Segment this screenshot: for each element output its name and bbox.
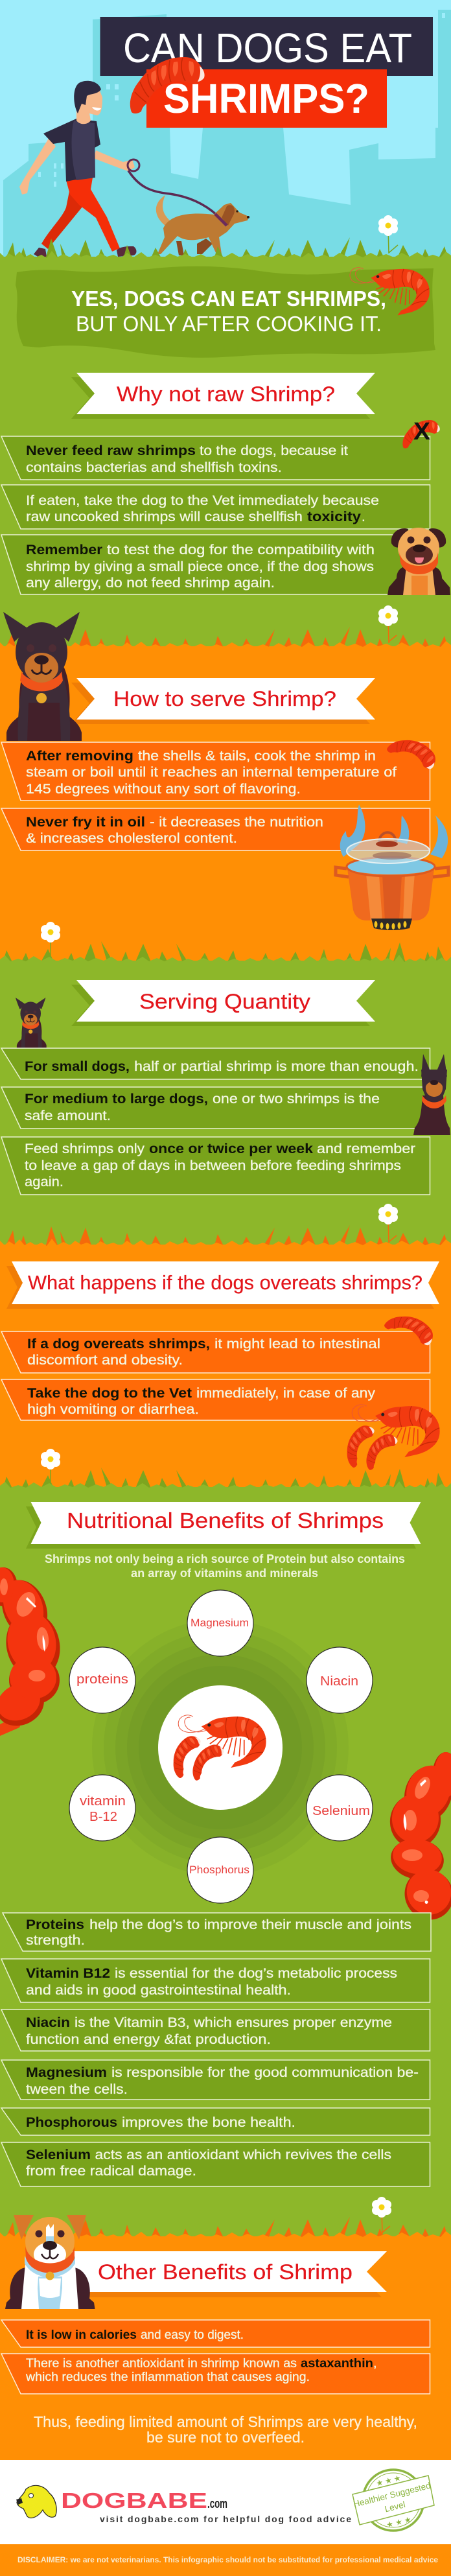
panel: never fry: - it decreases the nutrition	[150, 815, 323, 830]
panel: after removing: steam or boil until it reaches an internal temperature of	[26, 765, 397, 780]
answer panel: BUT ONLY AFTER COOKING IT.	[76, 312, 382, 336]
node: proteins: proteins	[76, 1672, 128, 1687]
panel: small dogs: half or partial shrimp is more than enough.	[134, 1059, 419, 1074]
intro text: an array of vitamins and minerals	[131, 1567, 318, 1580]
man walking	[19, 81, 136, 257]
node: selenium	[306, 1775, 373, 1841]
logo: dogbabe	[16, 2485, 351, 2524]
panel: remember to test: to test the dog for the compatibility with	[107, 543, 375, 557]
icon: crossed shrimp: X	[413, 418, 431, 445]
heading: what happens if overeats: What happens if the dogs overeats shrimps?	[28, 1271, 422, 1294]
disclaimer: DISCLAIMER: we are not veterinarians. This infographic should not be substituted for professional medical advice	[17, 2557, 438, 2564]
icon: peeled shrimp on title	[130, 57, 205, 113]
node: niacin: Niacin	[320, 1674, 358, 1689]
panel: proteins: strength.	[26, 1933, 85, 1948]
stamp: healthier suggested level: ★ ★ ★	[375, 2473, 402, 2488]
closing statement: Thus, feeding limited amount of Shrimps are very healthy,	[34, 2413, 417, 2430]
central shrimp disc	[158, 1685, 283, 1810]
panel: overeats: it might lead to intestinal	[214, 1337, 380, 1352]
icon: big shrimp right	[385, 1752, 451, 1928]
panel: take to vet: .	[362, 509, 365, 524]
panel: take the dog to the vet: immediately, in case of any	[196, 1386, 376, 1401]
grass: sky to green	[0, 237, 451, 262]
icon: white and orange dog	[5, 2215, 95, 2309]
panel: take to vet	[1, 485, 430, 529]
icon: red shrimp	[350, 268, 430, 315]
panel: after removing: After removing	[26, 749, 133, 764]
panel: magnesium	[1, 2060, 430, 2100]
icon: shrimp	[383, 1303, 438, 1359]
logo: dogbabe: .com	[207, 2497, 227, 2511]
panel: selenium: acts as an antioxidant which revives the cells	[95, 2148, 391, 2162]
stamp: healthier suggested level: ★ ★ ★	[386, 2514, 412, 2529]
panel: remember to test	[1, 535, 430, 594]
panel: proteins: help the dog’s to improve their muscle and joints	[89, 1917, 411, 1932]
logo: dogbabe: visit dogbabe.com for helpful dog food advice	[100, 2514, 351, 2524]
panel: never feed raw: Never feed raw shrimps	[26, 443, 196, 458]
panel: niacin	[1, 2009, 430, 2051]
heading: why not raw shrimp	[71, 373, 375, 419]
answer panel	[16, 266, 435, 358]
intro text	[45, 1552, 405, 1580]
panel: remember to test: Remember	[26, 543, 102, 557]
icon: black dog	[3, 612, 82, 741]
node: vitamin b-12: vitamin	[80, 1794, 126, 1809]
heading: how to serve shrimp: How to serve Shrimp?	[113, 687, 336, 710]
icon: shrimp	[386, 727, 441, 783]
panel: magnesium: tween the cells.	[26, 2082, 128, 2097]
node: phosphorus	[187, 1837, 253, 1903]
intro text: Shrimps not only being a rich source of Protein but also contains	[45, 1552, 405, 1565]
panel: after removing	[1, 742, 430, 801]
icon: flower	[372, 2197, 391, 2234]
panel: never fry	[1, 808, 430, 850]
panel: vitamin b12: Vitamin B12	[26, 1966, 110, 1981]
panel: astaxanthin: astaxanthin	[301, 2356, 373, 2371]
panel: low in calories: and easy to digest.	[141, 2328, 244, 2342]
panel: niacin: Niacin	[26, 2015, 70, 2030]
halo rings	[92, 1619, 349, 1876]
panel: after removing: 145 degrees without any sort of flavoring.	[26, 782, 301, 797]
dog on leash	[128, 159, 249, 255]
panel: once or twice per week: Feed shrimps only	[25, 1142, 145, 1156]
panel: selenium: from free radical damage.	[26, 2164, 196, 2179]
node: niacin	[306, 1647, 373, 1713]
panel: take to vet: toxicity	[307, 509, 361, 524]
panel: remember to test: shrimp by giving a small piece once, if the dog shows	[26, 559, 374, 574]
icon: flower	[41, 1449, 60, 1487]
title: shrimps: SHRIMPS?	[163, 75, 369, 122]
heading: serving quantity: Serving Quantity	[139, 990, 310, 1013]
icon: pug dog	[387, 528, 450, 595]
panel: phosphorous: improves the bone health.	[122, 2115, 295, 2130]
panel: niacin: function and energy &fat production.	[26, 2032, 271, 2047]
grass: orange to green	[0, 941, 451, 966]
heading: other benefits	[65, 2251, 387, 2297]
panel: take to vet: raw uncooked shrimps will cause shellfish	[26, 509, 303, 524]
closing statement: be sure not to overfeed.	[146, 2429, 305, 2446]
node: phosphorus: Phosphorus	[189, 1864, 249, 1876]
answer panel: YES, DOGS CAN EAT SHRIMPS,	[71, 287, 386, 310]
node: selenium: Selenium	[312, 1804, 370, 1818]
stamp: healthier suggested level: Healthier Suggested	[353, 2481, 432, 2509]
panel: after removing: the shells & tails, cook the shrimp in	[138, 749, 376, 764]
panel: once or twice per week: once or twice per week	[149, 1142, 313, 1156]
panel: overeats: If a dog overeats shrimps,	[27, 1337, 210, 1352]
icon: big shrimp left	[0, 1567, 66, 1736]
grass: green to orange	[0, 627, 451, 651]
grass: green to orange	[0, 2217, 451, 2242]
panel: medium to large dogs: For medium to large dogs,	[25, 1092, 208, 1107]
panel: phosphorous: Phosphorous	[26, 2115, 117, 2130]
panel: medium to large dogs: safe amount.	[25, 1108, 111, 1123]
panel: never feed raw: to the dogs, because it	[200, 443, 348, 458]
heading: what happens if overeats	[6, 1261, 439, 1309]
grass: orange to green	[0, 1468, 451, 1492]
panel: never fry: & increases cholesterol content.	[26, 831, 237, 846]
panel: once or twice per week	[1, 1137, 430, 1195]
panel: medium to large dogs	[1, 1087, 430, 1129]
panel: never feed raw: contains bacterias and shellfish toxins.	[26, 460, 282, 475]
node: vitamin b-12: B-12	[89, 1810, 117, 1824]
panel: niacin: is the Vitamin B3, which ensures proper enzyme	[75, 2015, 392, 2030]
title: can dogs eat: CAN DOGS EAT	[123, 25, 412, 71]
panel: magnesium: Magnesium	[26, 2065, 107, 2080]
panel: overeats: discomfort and obesity.	[27, 1353, 183, 1368]
icon: flower	[378, 215, 398, 253]
icon: small dog	[16, 998, 47, 1049]
icon: shrimp group	[336, 1405, 440, 1471]
panel: take the dog to the vet: Take the dog to the Vet	[27, 1386, 192, 1401]
panel: once or twice per week: and remember	[317, 1142, 415, 1156]
node: vitamin b-12	[69, 1775, 135, 1841]
heading: other benefits: Other Benefits of Shrimp	[98, 2260, 353, 2284]
closing statement	[34, 2413, 417, 2446]
icon: flower	[378, 605, 398, 643]
panel: astaxanthin: which reduces the inflammation that causes aging.	[25, 2370, 310, 2384]
node: proteins	[69, 1647, 135, 1713]
panel: vitamin b12: and aids in good gastrointestinal health.	[26, 1983, 291, 1998]
heading: how to serve shrimp	[71, 678, 375, 724]
panel: low in calories: It is low in calories	[26, 2328, 137, 2342]
panel: selenium: Selenium	[26, 2148, 91, 2162]
panel: take the dog to the vet	[1, 1379, 430, 1420]
panel: proteins: Proteins	[26, 1917, 84, 1932]
panel: remember to test: any allergy, do not feed shrimp again.	[26, 576, 275, 591]
node: magnesium: Magnesium	[191, 1617, 249, 1629]
panel: astaxanthin	[1, 2354, 430, 2394]
panel: proteins	[3, 1913, 431, 1951]
icon: yellow dog	[16, 2485, 56, 2518]
logo: dogbabe: DOGBABE	[61, 2488, 207, 2512]
panel: vitamin b12	[1, 1959, 430, 2002]
panel: small dogs	[1, 1048, 430, 1079]
heading: why not raw shrimp: Why not raw Shrimp?	[117, 382, 335, 406]
stamp: healthier suggested level: Level	[384, 2500, 406, 2514]
panel: vitamin b12: is essential for the dog’s metabolic process	[115, 1966, 397, 1981]
panel: never feed raw	[1, 436, 430, 480]
panel: low in calories	[1, 2320, 430, 2347]
heading: serving quantity	[71, 980, 375, 1026]
panel: phosphorous	[1, 2108, 430, 2135]
heading: nutritional benefits	[26, 1502, 421, 1549]
heading: nutritional benefits: Nutritional Benefits of Shrimps	[67, 1508, 384, 1532]
panel: medium to large dogs: one or two shrimps is the	[213, 1092, 380, 1107]
panel: selenium	[1, 2142, 430, 2186]
node: magnesium	[187, 1590, 253, 1656]
panel: astaxanthin: There is another antioxidant in shrimp known as	[26, 2356, 297, 2371]
panel: small dogs: For small dogs,	[25, 1059, 130, 1074]
city skyline	[3, 10, 451, 257]
chart: nutrient hub	[69, 1590, 373, 1903]
icon: flower	[378, 1204, 398, 1243]
icon: flower	[41, 922, 60, 961]
panel: once or twice per week: to leave a gap of days in between before feeding shrimps	[25, 1158, 401, 1173]
icon: boiling pot	[336, 804, 448, 930]
panel: magnesium: is responsible for the good communication be-	[111, 2065, 419, 2080]
panel: astaxanthin: ,	[373, 2356, 376, 2371]
icon: crossed shrimp	[402, 418, 440, 449]
panel: never fry: Never fry it in oil	[26, 815, 145, 830]
grass: green to orange	[0, 1225, 451, 1250]
panel: take the dog to the vet: high vomiting or diarrhea.	[27, 1402, 199, 1417]
panel: overeats	[1, 1331, 430, 1373]
stamp: healthier suggested level	[349, 2466, 439, 2536]
panel: once or twice per week: again.	[25, 1175, 64, 1189]
panel: take to vet: If eaten, take the dog to the Vet immediately because	[26, 493, 379, 508]
icon: doberman	[413, 1054, 450, 1135]
